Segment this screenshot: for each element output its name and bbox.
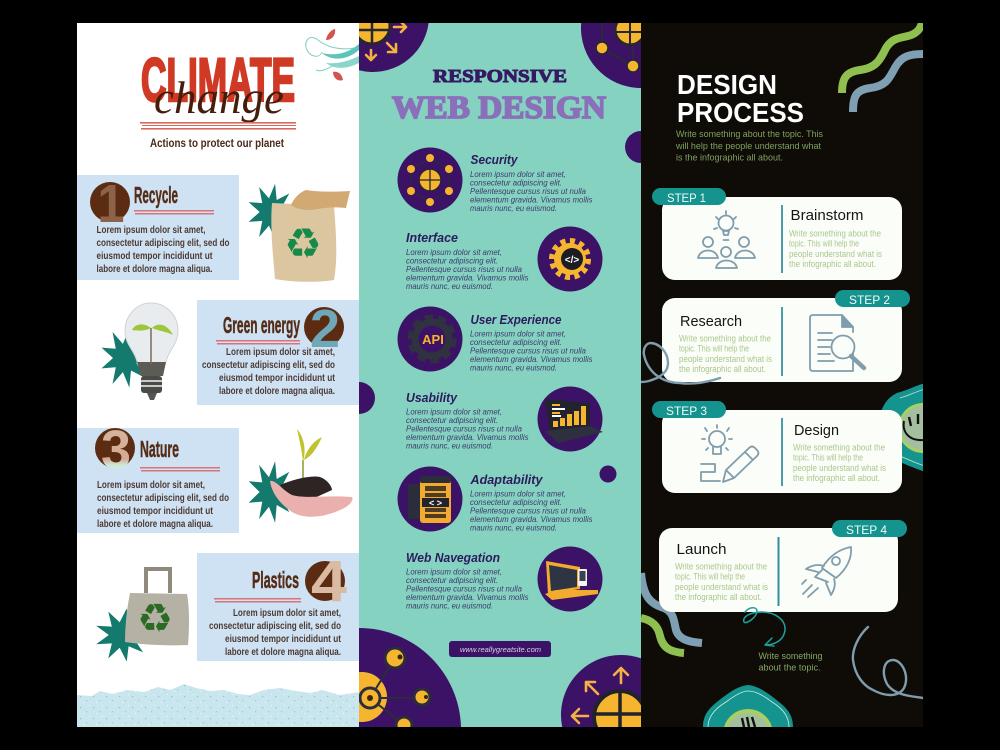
underline	[216, 340, 300, 344]
title: change script: change	[154, 72, 284, 123]
body text: elementum gravida. Vivamus mollis	[406, 432, 529, 442]
card text: the infographic all about.	[679, 364, 766, 374]
arrow: curved note arrow	[744, 608, 785, 646]
divider	[781, 418, 783, 486]
corner circle top left with arrows	[359, 23, 429, 72]
note text: about the topic.	[758, 662, 820, 674]
number badge 1	[90, 182, 130, 222]
divider	[778, 537, 780, 606]
icon: laptop and phone	[538, 546, 602, 612]
step 4 pill: STEP 4	[846, 523, 887, 537]
body text: Lorem ipsum dolor sit amet,	[233, 608, 341, 619]
triptych canvas	[77, 23, 923, 727]
step 2 pill	[835, 290, 910, 307]
body text: elementum gravida. Vivamus mollis	[470, 194, 593, 204]
number badge 1: 1	[98, 174, 124, 234]
illustration: hand with recycled bag	[249, 184, 350, 282]
title: responsive: RESPONSIVE	[433, 66, 567, 86]
website button: www.reallygreatsite.com	[460, 645, 541, 654]
heading research: Research	[680, 313, 742, 330]
title: design process: PROCESS	[677, 97, 804, 128]
body text: Lorem ipsum dolor sit amet,	[470, 169, 566, 179]
step 4 card	[659, 520, 907, 612]
body text: consectetur adipiscing elit, sed do	[96, 238, 230, 249]
heading adaptability: Adaptability	[470, 472, 543, 487]
card text: topic. This will help the	[679, 344, 749, 354]
card text: people understand what is	[675, 582, 768, 592]
body text: consectetur adipiscing elit.	[406, 415, 498, 425]
body text: Pellentesque cursus risus ut nulla	[470, 506, 586, 516]
body text: Lorem ipsum dolor sit amet,	[406, 566, 502, 576]
corner circle bottom right with arrows	[561, 655, 646, 743]
intro text	[675, 129, 823, 164]
corner circle bottom left with network	[337, 628, 461, 733]
body text: Lorem ipsum dolor sit amet,	[470, 328, 566, 338]
subtitle: Actions to protect our planet	[150, 138, 284, 150]
body text: mauris nunc, eu euismod.	[470, 203, 557, 213]
card text: people understand what is	[793, 463, 886, 473]
heading usability: Usability	[406, 390, 458, 405]
illustration: tote bag	[96, 569, 189, 662]
card text: people understand what is	[679, 354, 772, 364]
body text: Pellentesque cursus risus ut nulla	[470, 346, 586, 356]
body text: consectetur adipiscing elit.	[470, 497, 562, 507]
body text: eiusmod tempor incididunt ut	[225, 634, 342, 645]
section 1: recycle	[77, 174, 239, 280]
body text: labore et dolore magna aliqua.	[97, 519, 213, 530]
illustration: hand with recycled bag: ♻	[284, 219, 322, 268]
number badge 3	[95, 428, 135, 468]
heading green energy: Green energy	[223, 312, 300, 338]
icon: bulb and pencil	[701, 425, 758, 482]
icon: rocket	[802, 547, 851, 597]
body text: consectetur adipiscing elit.	[406, 256, 498, 266]
body text	[470, 488, 593, 532]
icon: code gear: </>	[565, 255, 579, 266]
body text: elementum gravida. Vivamus mollis	[470, 354, 593, 364]
card text: topic. This will help the	[793, 452, 863, 462]
body text: consectetur adipiscing elit, sed do	[202, 360, 335, 371]
body text: mauris nunc, eu euismod.	[406, 281, 493, 291]
body text	[209, 608, 342, 658]
number badge 2: 2	[310, 299, 340, 359]
card text: the infographic all about.	[793, 473, 880, 483]
decorative waves behind step 4	[641, 573, 702, 653]
body text: Pellentesque cursus risus ut nulla	[406, 584, 522, 594]
heading plastics: Plastics	[252, 567, 299, 593]
body text: Pellentesque cursus risus ut nulla	[406, 264, 522, 274]
decorative dots	[359, 131, 641, 482]
body text: labore et dolore magna aliqua.	[225, 647, 341, 658]
body text	[96, 225, 230, 275]
panel: responsive web design	[359, 23, 641, 727]
body text: elementum gravida. Vivamus mollis	[470, 514, 593, 524]
body text: Pellentesque cursus risus ut nulla	[470, 186, 586, 196]
title: climate: CLIMATE	[141, 46, 295, 114]
section 4: plastics	[197, 549, 359, 661]
panel: climate change	[77, 23, 359, 727]
divider	[781, 307, 783, 376]
body text: Lorem ipsum dolor sit amet,	[226, 347, 335, 358]
heading brainstorm: Brainstorm	[790, 207, 864, 224]
body text	[406, 247, 529, 291]
heading launch: Launch	[676, 541, 726, 558]
number badge 2	[304, 307, 344, 347]
panel: design process	[641, 23, 948, 727]
decorative swirl with leaves	[306, 29, 359, 81]
illustration: hand holding sprout	[249, 429, 352, 523]
body text: eiusmod tempor incididunt ut	[219, 373, 336, 384]
icon: responsive window	[398, 466, 462, 532]
icon: API gear	[398, 306, 462, 372]
heading design: Design	[794, 422, 839, 439]
note text	[758, 651, 822, 674]
body text: elementum gravida. Vivamus mollis	[406, 592, 529, 602]
title: design process	[677, 69, 804, 128]
item: interface	[406, 226, 602, 292]
card text: the infographic all about.	[789, 259, 876, 269]
corner circle top right with network	[581, 23, 641, 88]
section 2: green energy	[197, 299, 359, 405]
smiley badge right	[879, 383, 948, 472]
step 2 card	[662, 290, 910, 382]
intro text: is the infographic all about.	[676, 152, 783, 164]
heading nature: Nature	[140, 436, 179, 462]
step 1 pill: STEP 1	[667, 191, 706, 205]
item: adaptability	[398, 466, 593, 532]
step 4 pill	[832, 520, 907, 537]
illustration: light bulb with sprout	[102, 303, 178, 400]
decorative swirl over step 2	[641, 343, 720, 384]
step 3 pill	[652, 401, 726, 418]
icon: laptop with chart	[538, 386, 603, 452]
decorative waves top right	[842, 23, 924, 112]
body text: Lorem ipsum dolor sit amet,	[406, 247, 502, 257]
step 1 pill	[652, 188, 726, 205]
card text: the infographic all about.	[675, 592, 762, 602]
smiley badge bottom	[703, 685, 793, 727]
item: security	[398, 148, 593, 213]
title: design process: DESIGN	[677, 69, 777, 100]
number badge 4	[305, 561, 347, 602]
body text	[406, 406, 529, 450]
card text	[675, 562, 768, 602]
heading interface: Interface	[406, 230, 458, 245]
torn paper footer	[77, 684, 359, 727]
icon: team brainstorm	[698, 211, 755, 268]
note text: Write something	[758, 651, 822, 662]
card text	[679, 334, 772, 374]
underline	[134, 210, 214, 214]
body text: consectetur adipiscing elit.	[406, 575, 498, 585]
body text: consectetur adipiscing elit.	[470, 178, 562, 188]
underline	[140, 467, 220, 472]
website button	[449, 641, 551, 657]
body text: Lorem ipsum dolor sit amet,	[96, 225, 206, 236]
body text: Lorem ipsum dolor sit amet,	[470, 488, 566, 498]
decorative spiral bottom right	[853, 627, 923, 698]
heading recycle: Recycle	[134, 182, 178, 208]
card text: people understand what is	[789, 249, 882, 259]
icon: code gear	[538, 226, 602, 292]
body text: labore et dolore magna aliqua.	[219, 386, 335, 397]
item: web navigation	[406, 546, 602, 612]
body text: consectetur adipiscing elit, sed do	[97, 493, 229, 504]
body text: mauris nunc, eu euismod.	[470, 522, 557, 532]
card text: topic. This will help the	[789, 238, 859, 248]
step 2 pill: STEP 2	[849, 293, 890, 307]
heading security: Security	[470, 152, 518, 167]
card text: Write something about the	[675, 562, 767, 572]
icon: API gear: API	[422, 332, 444, 347]
body text: eiusmod tempor incididunt ut	[96, 251, 213, 262]
item: usability	[406, 386, 603, 452]
body text: eiusmod tempor incididunt ut	[97, 506, 214, 517]
illustration: tote bag: ♻	[137, 596, 173, 642]
card text: Write something about the	[679, 334, 771, 344]
body text: consectetur adipiscing elit.	[470, 337, 562, 347]
body text: Pellentesque cursus risus ut nulla	[406, 424, 522, 434]
divider	[781, 205, 783, 273]
heading web navigation: Web Navegation	[406, 550, 500, 565]
number badge 4: 4	[311, 549, 347, 614]
icon: security network	[398, 148, 462, 212]
card text: topic. This will help the	[675, 572, 745, 582]
card text	[793, 442, 886, 483]
body text	[406, 566, 529, 610]
heading user experience: User Experience	[470, 312, 562, 327]
section 3: nature	[77, 420, 239, 533]
body text: consectetur adipiscing elit, sed do	[209, 621, 341, 632]
step 3 card	[652, 401, 902, 493]
body text: Lorem ipsum dolor sit amet,	[97, 480, 205, 491]
title: web design: WEB DESIGN	[392, 89, 606, 125]
body text: mauris nunc, eu euismod.	[470, 362, 557, 372]
icon: document with magnifier	[810, 315, 864, 371]
intro text: will help the people understand what	[675, 141, 821, 152]
body text: labore et dolore magna aliqua.	[96, 264, 213, 275]
intro text: Write something about the topic. This	[676, 129, 823, 140]
card text: Write something about the	[789, 228, 881, 238]
number badge 3: 3	[101, 420, 131, 480]
item: user experience	[398, 306, 593, 372]
body text	[470, 328, 593, 372]
step 1 card	[652, 188, 902, 280]
icon: responsive window: < >	[429, 498, 442, 508]
body text	[470, 169, 593, 213]
step 3 pill: STEP 3	[666, 404, 707, 418]
body text: mauris nunc, eu euismod.	[406, 440, 493, 450]
card text	[789, 228, 882, 269]
body text: Lorem ipsum dolor sit amet,	[406, 406, 502, 416]
body text: mauris nunc, eu euismod.	[406, 600, 493, 610]
body text	[202, 347, 336, 397]
body text: elementum gravida. Vivamus mollis	[406, 272, 529, 282]
underline	[214, 598, 301, 602]
card text: Write something about the	[793, 442, 885, 452]
body text	[97, 480, 229, 530]
title underline	[140, 122, 296, 130]
